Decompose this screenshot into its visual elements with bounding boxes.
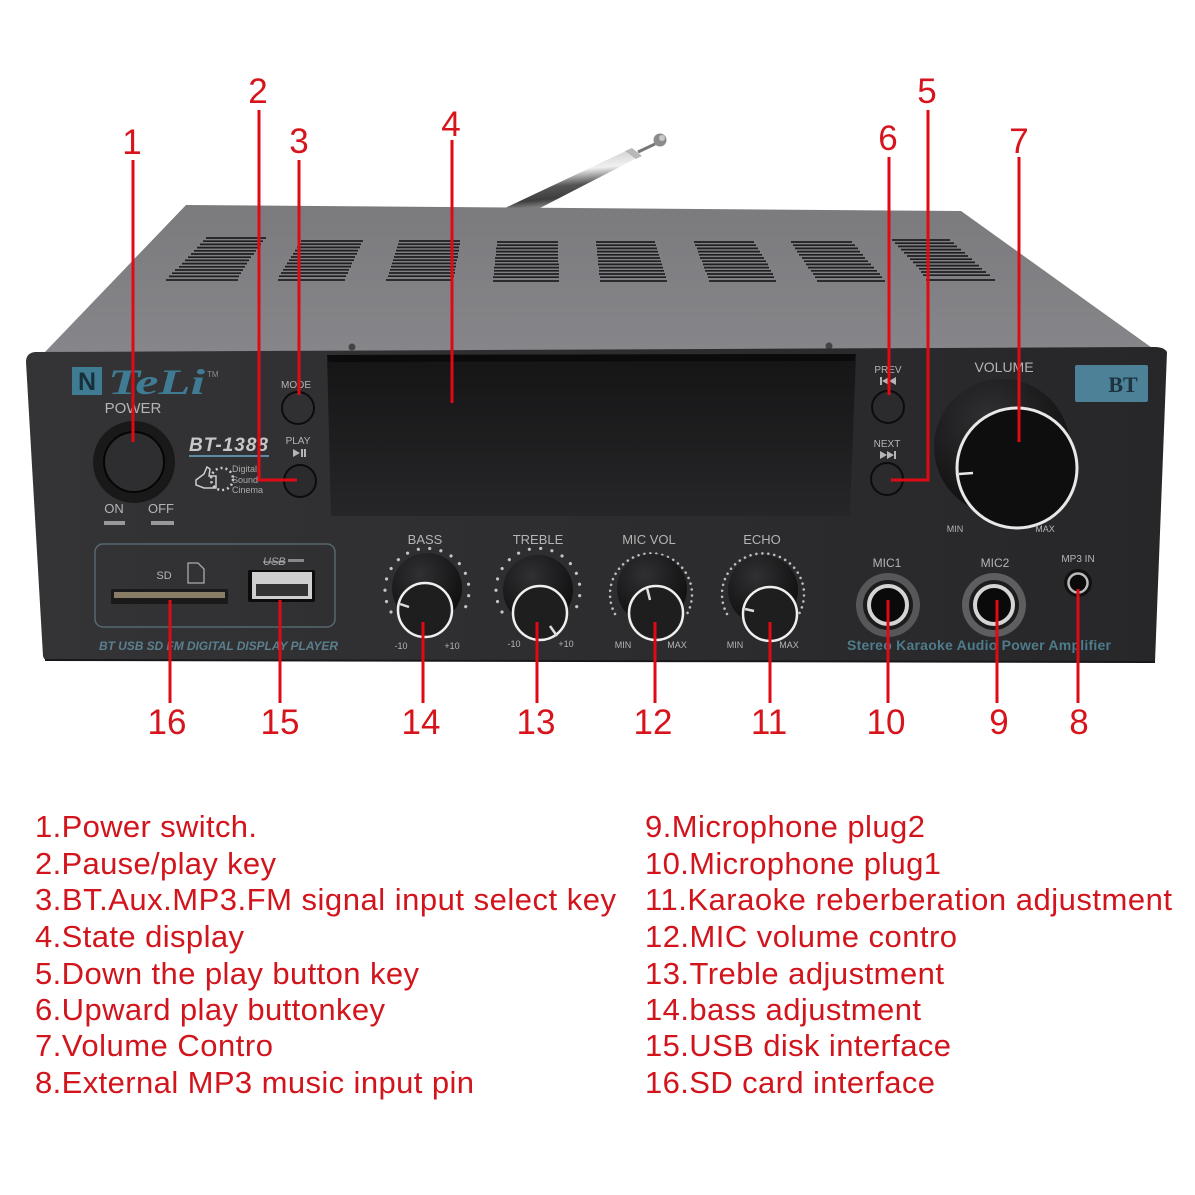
- mic volume knob: [610, 532, 692, 650]
- echo knob: MAX: [779, 640, 799, 650]
- volume knob: [934, 359, 1077, 534]
- echo knob: MIN: [727, 640, 743, 650]
- callout numbers: [122, 72, 1089, 742]
- callout numbers: 10: [867, 703, 905, 742]
- microphone jack 2: MIC2: [981, 556, 1010, 570]
- legend: items 1 to 8: 5.Down the play button key: [35, 956, 420, 991]
- callout numbers: 12: [634, 703, 672, 742]
- treble knob: +10: [558, 639, 574, 649]
- power switch: [93, 400, 175, 525]
- legend: items 9 to 16: 12.MIC volume contro: [645, 919, 957, 954]
- callout numbers: 8: [1069, 703, 1089, 742]
- model badge: Sound: [232, 475, 258, 485]
- buttons: prev and next: PREV: [874, 365, 902, 376]
- mic volume knob: MIN: [615, 640, 631, 650]
- state display window: [327, 354, 856, 516]
- legend: items 1 to 8: 8.External MP3 music input pin: [35, 1065, 474, 1100]
- legend: items 9 to 16: 13.Treble adjustment: [645, 956, 944, 991]
- echo knob: ECHO: [743, 532, 781, 547]
- callout numbers: 14: [402, 703, 440, 742]
- callout numbers: 13: [517, 703, 555, 742]
- SD and USB panel: SD: [156, 570, 172, 582]
- legend: items 9 to 16: [645, 809, 1172, 1100]
- buttons: mode and play: MODE: [281, 380, 311, 391]
- buttons: mode and play: PLAY: [286, 436, 311, 447]
- callout numbers: 11: [751, 703, 787, 742]
- legend: items 1 to 8: 2.Pause/play key: [35, 846, 276, 881]
- callout numbers: 9: [989, 703, 1009, 742]
- brand logo: N: [78, 368, 96, 396]
- callout numbers: 15: [261, 703, 299, 742]
- amplifier front panel: [26, 347, 1167, 662]
- power switch: POWER: [105, 400, 161, 417]
- SD and USB panel: USB: [263, 556, 286, 568]
- model badge: Digital: [232, 464, 257, 474]
- amplifier tagline: Stereo Karaoke Audio Power Amplifier: [847, 637, 1112, 653]
- callout numbers: 4: [441, 105, 461, 144]
- volume knob: VOLUME: [974, 359, 1034, 375]
- SD and USB panel: BT USB SD FM DIGITAL DISPLAY PLAYER: [99, 639, 338, 653]
- treble knob: TREBLE: [513, 532, 564, 547]
- callout numbers: 2: [248, 72, 268, 111]
- callout numbers: 6: [878, 119, 898, 158]
- model badge: Cinema: [232, 485, 263, 495]
- legend: items 1 to 8: 1.Power switch.: [35, 809, 257, 844]
- BT badge: [1075, 365, 1148, 402]
- legend: items 1 to 8: [35, 809, 616, 1100]
- brand logo: TM: [207, 370, 219, 379]
- microphone jack 2: [962, 556, 1026, 637]
- legend: items 9 to 16: 10.Microphone plug1: [645, 846, 941, 881]
- brand logo: [72, 362, 219, 402]
- microphone jack 1: MIC1: [873, 556, 902, 570]
- treble knob: [496, 532, 580, 649]
- bass knob: BASS: [408, 532, 443, 547]
- bass knob: -10: [394, 641, 408, 651]
- callout numbers: 1: [122, 123, 142, 162]
- buttons: mode and play: [281, 380, 316, 497]
- bass knob: [385, 532, 469, 651]
- legend: items 1 to 8: 6.Upward play buttonkey: [35, 992, 386, 1027]
- legend: items 9 to 16: 14.bass adjustment: [645, 992, 921, 1027]
- SD and USB panel: [95, 544, 338, 653]
- legend: items 1 to 8: 3.BT.Aux.MP3.FM signal input select key: [35, 882, 616, 917]
- mic volume knob: MIC VOL: [622, 532, 676, 547]
- mic volume knob: MAX: [667, 640, 687, 650]
- legend: items 9 to 16: 16.SD card interface: [645, 1065, 935, 1100]
- buttons: prev and next: NEXT: [874, 439, 900, 450]
- callout numbers: 3: [289, 122, 309, 161]
- callout numbers: 7: [1009, 122, 1029, 161]
- treble knob: -10: [507, 639, 521, 649]
- legend: items 9 to 16: 11.Karaoke reberberation adjustment: [645, 882, 1172, 917]
- buttons: prev and next: [871, 365, 904, 495]
- legend: items 1 to 8: 4.State display: [35, 919, 244, 954]
- amplifier top cover with vents: [45, 205, 1155, 352]
- echo knob: [722, 532, 804, 650]
- legend: items 9 to 16: 15.USB disk interface: [645, 1028, 951, 1063]
- MP3 input jack: MP3 IN: [1061, 554, 1095, 565]
- callout lines: [133, 110, 1078, 703]
- model badge: BT-1388: [189, 435, 268, 456]
- volume knob: MIN: [947, 524, 963, 534]
- callout numbers: 16: [148, 703, 186, 742]
- callout numbers: 5: [917, 72, 937, 111]
- BT badge: BT: [1108, 372, 1138, 397]
- legend: items 9 to 16: 9.Microphone plug2: [645, 809, 925, 844]
- legend: items 1 to 8: 7.Volume Contro: [35, 1028, 273, 1063]
- brand logo: TeLi: [108, 362, 205, 402]
- power switch: ON: [104, 501, 124, 516]
- model badge: [189, 435, 269, 495]
- power switch: OFF: [148, 501, 174, 516]
- bass knob: +10: [444, 641, 460, 651]
- icon: telescopic antenna: [505, 134, 666, 208]
- volume knob: MAX: [1035, 524, 1055, 534]
- microphone jack 1: [856, 556, 920, 637]
- MP3 input jack: [1061, 554, 1095, 597]
